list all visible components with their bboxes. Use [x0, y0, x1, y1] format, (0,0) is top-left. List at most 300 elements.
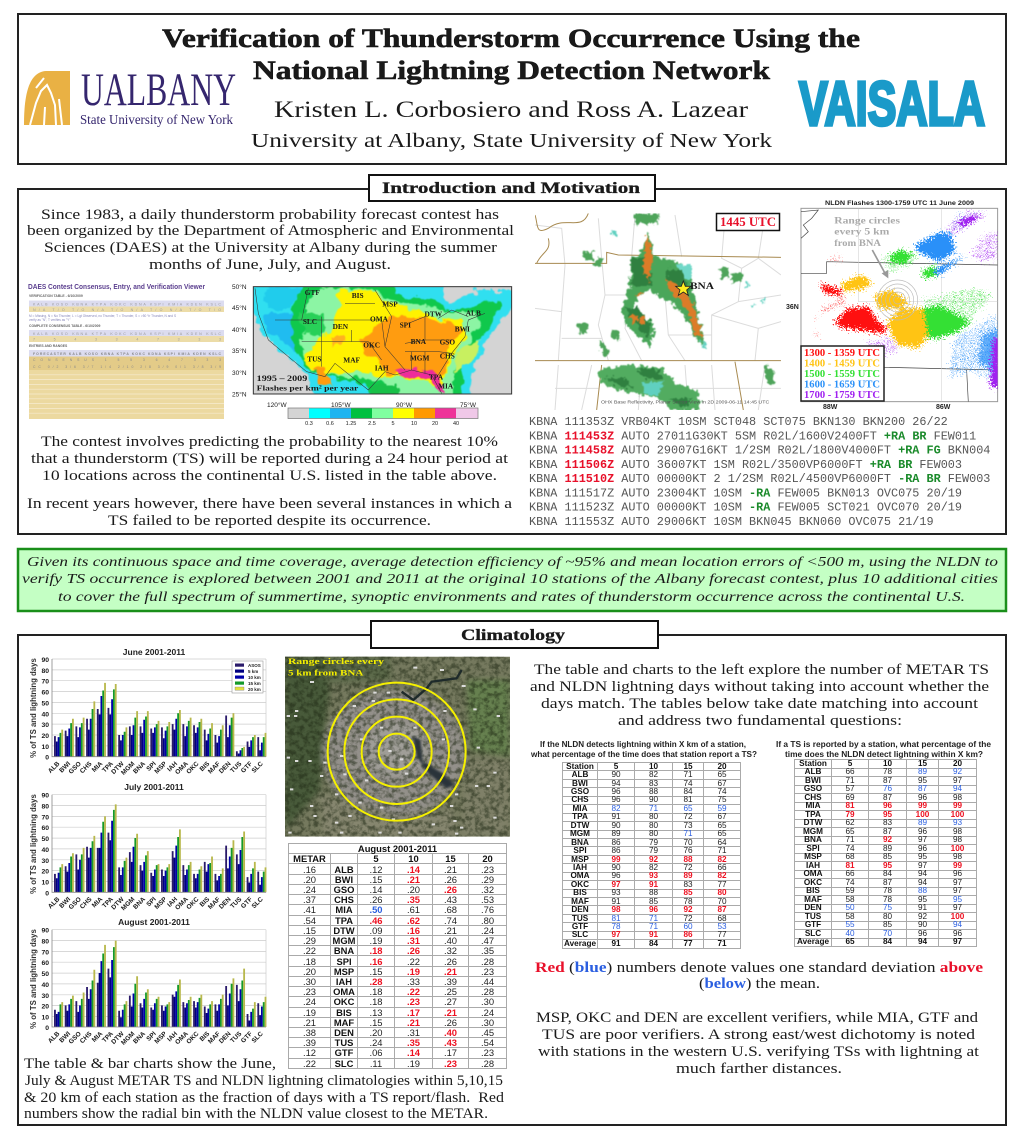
table: NLDN detection given TS: 84 [883, 869, 892, 878]
table: NLDN detection given TS: 10 [883, 759, 892, 768]
map axis labels [232, 283, 477, 409]
table: August METAR and NLDN climatology: .17 [444, 1047, 457, 1058]
table: TS given NLDN detection: 82 [649, 863, 658, 872]
table: August METAR and NLDN climatology: .18 [369, 996, 383, 1007]
chart: August 2001-2011: TUS [229, 1030, 244, 1045]
text: failure instances: In recent years however, there have been several instances in which a [27, 496, 513, 512]
chart: July 2001-2011: 70 [41, 814, 49, 821]
text: METAR observations: KBNA 111353Z VRB04KT 10SM SCT048 SCT075 BKN130 BKN200 26/22 [529, 415, 948, 429]
chart: August 2001-2011: 70 [41, 949, 49, 956]
title: National Lightning Detection Network [253, 55, 770, 85]
text: climatology intro [530, 662, 989, 729]
color bar legend: 10 [411, 421, 417, 427]
table: August METAR and NLDN climatology: .28 [481, 1058, 494, 1069]
chart: August 2001-2011: 0 [45, 1025, 49, 1032]
table: TS given NLDN detection: 68 [717, 914, 727, 923]
text: verifier conclusions [536, 1010, 979, 1077]
table: NLDN detection given TS: 96 [883, 801, 892, 810]
table: NLDN detection given TS: MAF [804, 895, 822, 904]
table: August METAR and NLDN climatology: .62 [407, 915, 420, 926]
table: NLDN detection given TS: 95 [918, 776, 927, 785]
table: August METAR and NLDN climatology: .23 [303, 986, 316, 997]
table: NLDN detection given TS [794, 759, 977, 948]
table: August METAR and NLDN climatology: .29 [303, 935, 316, 946]
table: NLDN detection given TS: 98 [953, 852, 962, 861]
table: TS given NLDN detection: 88 [649, 787, 658, 796]
screenshot: contest viewer table: M = Missing, N = No Thunder, L = Lgt Observed, no Thunder, T = Thunder, S = >50 Yr Thunder, N and S [29, 314, 176, 318]
map axis labels: 75°W [460, 401, 477, 409]
screenshot: contest viewer table: N/A T/O T/O N/A T/O N/A T/O N/A T/O T/O [33, 308, 221, 312]
table: August METAR and NLDN climatology: .74 [444, 915, 457, 926]
table: NLDN detection given TS: 92 [953, 767, 962, 776]
table: TS given NLDN detection: GTF [572, 922, 588, 931]
screenshot: contest viewer table: KALB KOSO KBNA KTPA KOKC KDNA KSPI KMIA KDEN KSLC [33, 302, 221, 306]
table: TS given NLDN detection: 66 [717, 863, 727, 872]
table: August METAR and NLDN climatology: .35 [407, 894, 420, 905]
legend: flash time bins [801, 346, 884, 401]
table: August METAR and NLDN climatology: .61 [407, 904, 420, 915]
radar image [535, 213, 781, 410]
map: flash density: MAF [343, 355, 361, 364]
table: TS given NLDN detection: 97 [611, 930, 621, 939]
table: August METAR and NLDN climatology: DTW [333, 925, 355, 936]
chart: July 2001-2011: BWI [58, 896, 72, 910]
table: TS given NLDN detection: 96 [611, 871, 621, 880]
chart: June 2001-2011: SLC [251, 760, 265, 775]
table: TS given NLDN detection: 65 [717, 770, 727, 779]
table: NLDN detection given TS: 95 [883, 810, 892, 819]
table: TS given NLDN detection: 53 [717, 922, 727, 931]
table 1 heading: If the NLDN detects lightning within X km of a station, [540, 739, 746, 749]
table: August METAR and NLDN climatology: .12 [369, 864, 383, 875]
table: NLDN detection given TS: 96 [918, 827, 927, 836]
table: NLDN detection given TS: 58 [845, 895, 855, 904]
chart: June 2001-2011: 50 [41, 700, 49, 707]
table: August METAR and NLDN climatology: .12 [303, 1047, 316, 1058]
table: NLDN detection given TS: 89 [918, 818, 927, 827]
table: TS given NLDN detection: 70 [717, 897, 727, 906]
chart: June 2001-2011: 90 [41, 657, 49, 664]
panel: climatology [18, 621, 1006, 1125]
table: August METAR and NLDN climatology: .24 [369, 1037, 383, 1048]
chart: August 2001-2011: MGM [120, 1030, 136, 1047]
table: August METAR and NLDN climatology: .43 [444, 1037, 457, 1048]
table: TS given NLDN detection: OMA [570, 871, 590, 880]
table: August METAR and NLDN climatology: .26 [444, 956, 457, 967]
screenshot: contest viewer table: COMPLETE CONSENSUS TABLE - 6/10/2009 [29, 324, 100, 328]
table: NLDN detection given TS: 78 [883, 895, 892, 904]
table: TS given NLDN detection: 79 [649, 838, 658, 847]
chart: August 2001-2011: % of TS and lightning days [29, 929, 38, 1029]
table: TS given NLDN detection: 93 [611, 888, 621, 897]
text: contest description [27, 207, 514, 273]
table: NLDN detection given TS: 65 [845, 937, 855, 946]
table: TS given NLDN detection: 84 [683, 787, 693, 796]
table: August METAR and NLDN climatology: .31 [407, 1027, 420, 1038]
legend: chart series: 5 km [248, 669, 258, 674]
chart: July 2001-2011: July 2001-2011 [124, 782, 184, 792]
table: August METAR and NLDN climatology: .24 [303, 884, 316, 895]
chart: July 2001-2011: BIS [199, 896, 212, 909]
text: contest rules: that a thunderstorm (TS) will be reported during a 24 hour period at [31, 451, 508, 467]
text: METAR observations: KBNA 111517Z AUTO 23004KT 10SM -RA FEW005 BKN013 OVC075 20/19 [529, 486, 962, 500]
table: NLDN detection given TS: 74 [845, 844, 855, 853]
chart: July 2001-2011: 80 [41, 804, 49, 810]
legend: flash time bins: 1600 - 1659 UTC [804, 380, 880, 390]
color bar legend: 20 [432, 421, 438, 427]
table: TS given NLDN detection: 77 [683, 939, 693, 948]
satellite image with range circles: 5 km from BNA [288, 668, 363, 677]
table: TS given NLDN detection: 90 [611, 821, 621, 830]
table: August METAR and NLDN climatology: .26 [444, 884, 457, 895]
table: TS given NLDN detection: 88 [683, 855, 693, 864]
table: August METAR and NLDN climatology: MSP [334, 966, 354, 977]
table: August METAR and NLDN climatology: TPA [335, 915, 353, 926]
text: chart description [24, 1056, 504, 1122]
chart: August 2001-2011: 40 [41, 982, 49, 989]
chart: August 2001-2011: BNA [132, 1030, 147, 1045]
table: August METAR and NLDN climatology: OKC [334, 996, 354, 1007]
chart: NLDN flash map: every 5 km [834, 227, 890, 237]
table: NLDN detection given TS: 97 [953, 903, 962, 912]
table: TS given NLDN detection: 80 [649, 829, 658, 838]
map: flash density: BIS [352, 291, 364, 300]
logo: UAlbany: State University of New York [80, 113, 233, 128]
table: NLDN detection given TS: 100 [951, 912, 964, 921]
table: TS given NLDN detection: 86 [611, 838, 621, 847]
color bar legend: 1.25 [346, 421, 356, 427]
table: NLDN detection given TS: 97 [953, 886, 962, 895]
screenshot: contest viewer table [28, 284, 224, 419]
chart: June 2001-2011: DEN [218, 760, 233, 775]
table: NLDN detection given TS: 75 [883, 903, 892, 912]
chart: June 2001-2011: OKC [185, 760, 201, 776]
table: NLDN detection given TS: BWI [805, 776, 821, 785]
table: August METAR and NLDN climatology: .19 [407, 966, 420, 977]
affiliation: University at Albany, State University of New York [251, 130, 773, 152]
screenshot: contest viewer table: DAES Contest Consensus, Entry, and Verification Viewer [28, 284, 205, 291]
table: NLDN detection given TS: TPA [805, 810, 821, 819]
chart: June 2001-2011: BNA [132, 760, 147, 775]
table: TS given NLDN detection: 80 [649, 812, 658, 821]
table: August METAR and NLDN climatology: .18 [369, 945, 383, 956]
text: verifier conclusions: TUS are poor verifiers. A strong east/west dichotomy is noted [542, 1027, 975, 1043]
table: NLDN detection given TS: 96 [918, 793, 927, 802]
map axis labels: 45°N [232, 304, 247, 312]
table: August METAR and NLDN climatology: .30 [481, 1017, 494, 1028]
panel: header [18, 14, 1006, 164]
table: August METAR and NLDN climatology: .53 [481, 894, 494, 905]
table: August METAR and NLDN climatology: .16 [407, 925, 420, 936]
table: TS given NLDN detection: 70 [683, 838, 693, 847]
table: August METAR and NLDN climatology: .20 [369, 1027, 383, 1038]
table: NLDN detection given TS: 92 [883, 835, 892, 844]
table: August METAR and NLDN climatology: .24 [303, 996, 316, 1007]
time label: 1445 UTC: 1445 UTC [720, 215, 776, 229]
table: TS given NLDN detection: 67 [717, 812, 727, 821]
text: chart description: numbers show the radial bin with the NLDN value closest to the METAR. [24, 1106, 488, 1122]
chart: July 2001-2011: 90 [41, 793, 49, 800]
table: TS given NLDN detection: 97 [611, 880, 621, 889]
table: August METAR and NLDN climatology: MIA [335, 904, 353, 915]
table: TS given NLDN detection: 82 [611, 804, 621, 813]
table: NLDN detection given TS: 70 [883, 929, 892, 938]
table: August METAR and NLDN climatology: .14 [407, 864, 420, 875]
table: TS given NLDN detection: BIS [573, 888, 587, 897]
table: NLDN detection given TS: 94 [953, 920, 962, 929]
table: August METAR and NLDN climatology: .68 [444, 904, 457, 915]
color bar legend: 0.6 [326, 421, 334, 427]
chart: July 2001-2011: MAF [207, 896, 222, 911]
table: TS given NLDN detection: 91 [611, 812, 621, 821]
table: August METAR and NLDN climatology: .21 [407, 1017, 420, 1028]
chart: June 2001-2011: TUS [229, 760, 244, 775]
map axis labels: 30°N [232, 369, 247, 377]
chart: August 2001-2011: 60 [41, 960, 49, 967]
table: TS given NLDN detection: 86 [611, 846, 621, 855]
table: TS given NLDN detection: 91 [611, 897, 621, 906]
chart: June 2001-2011: June 2001-2011 [123, 647, 185, 657]
table: TS given NLDN detection: 64 [717, 838, 727, 847]
table: August METAR and NLDN climatology: .30 [481, 996, 494, 1007]
table: TS given NLDN detection: SPI [573, 846, 587, 855]
text: failure instances: TS failed to be reported despite its occurrence. [108, 513, 431, 529]
table: NLDN detection given TS: 97 [953, 776, 962, 785]
table: NLDN detection given TS: 98 [953, 827, 962, 836]
table: TS given NLDN detection: 78 [683, 897, 693, 906]
callout: NLDN summary [18, 549, 1006, 611]
table: TS given NLDN detection: IAH [573, 863, 587, 872]
text: climatology intro: and address two fundamental questions: [618, 713, 902, 729]
table: August METAR and NLDN climatology: .22 [407, 986, 420, 997]
chart: June 2001-2011: 30 [41, 722, 49, 729]
chart: June 2001-2011: 20 [41, 733, 49, 740]
heading: introduction: Introduction and Motivation [382, 180, 640, 197]
text: METAR observations: KBNA 111453Z AUTO 27011G30KT 5SM R02L/1600V2400FT +RA BR FEW011 [529, 429, 976, 443]
table: NLDN detection given TS: 95 [918, 852, 927, 861]
table: NLDN detection given TS: 97 [953, 937, 962, 946]
chart: August 2001-2011: 20 [41, 1004, 49, 1011]
chart: August 2001-2011: MIA [91, 1030, 104, 1044]
legend: flash time bins: 1500 - 1559 UTC [804, 369, 880, 380]
table: TS given NLDN detection: 65 [717, 829, 727, 838]
table: August METAR and NLDN climatology: .39 [303, 1037, 316, 1048]
table: TS given NLDN detection: 92 [683, 905, 693, 914]
table: August METAR and NLDN climatology: 15 [445, 853, 456, 864]
chart: August 2001-2011: SLC [251, 1030, 265, 1045]
table: NLDN detection given TS: 85 [883, 920, 892, 929]
chart: August 2001-2011: BIS [199, 1030, 212, 1043]
chart: July 2001-2011: 20 [41, 869, 49, 876]
table: August METAR and NLDN climatology: .14 [407, 1047, 420, 1058]
table: NLDN detection given TS: 94 [918, 937, 927, 946]
chart: NLDN flash map: Range circles [834, 216, 901, 226]
table: TS given NLDN detection: MSP [571, 855, 589, 864]
table: August METAR and NLDN climatology: .31 [407, 935, 420, 946]
text: METAR observations: KBNA 111510Z AUTO 00000KT 2 1/2SM R02L/4500VP6000FT -RA BR FEW003 [529, 472, 990, 486]
map: flash density: TUS [307, 354, 321, 363]
heading: climatology [371, 621, 658, 648]
table: NLDN detection given TS: 5 [848, 759, 852, 768]
table: NLDN detection given TS: 88 [918, 886, 927, 895]
chart: August 2001-2011: 10 [41, 1014, 49, 1022]
chart: June 2001-2011: MSP [153, 760, 169, 775]
table: August METAR and NLDN climatology: .25 [444, 986, 457, 997]
text: climatology intro: days match. The tables below take date matching into account [541, 696, 978, 712]
table: August METAR and NLDN climatology: .27 [444, 996, 457, 1007]
table: NLDN detection given TS: 20 [953, 759, 962, 768]
chart: August 2001-2011: TPA [101, 1030, 115, 1044]
table: August METAR and NLDN climatology: .20 [303, 966, 316, 977]
table: TS given NLDN detection: 65 [717, 821, 727, 830]
table: TS given NLDN detection: GSO [571, 787, 589, 796]
table: TS given NLDN detection: BNA [571, 838, 589, 847]
table: NLDN detection given TS: 71 [845, 776, 855, 785]
heading: climatology: Climatology [461, 627, 565, 644]
table: NLDN detection given TS: 95 [883, 861, 892, 870]
map: flash density: Flashes per km² per year [257, 383, 359, 392]
map: flash density: MGM [410, 354, 429, 363]
table: August METAR and NLDN climatology: .26 [444, 1017, 457, 1028]
table: August METAR and NLDN climatology: .23 [407, 996, 420, 1007]
table: NLDN detection given TS: 66 [845, 767, 855, 776]
title: Verification of Thunderstorm Occurrence Using the [162, 23, 860, 53]
table: NLDN detection given TS: ALB [805, 767, 821, 776]
chart: June 2001-2011: 70 [41, 679, 49, 686]
table: August METAR and NLDN climatology: .40 [444, 935, 457, 946]
table: August METAR and NLDN climatology: .23 [481, 864, 494, 875]
text: verifier conclusions: MSP, OKC and DEN are excellent verifiers, while MIA, GTF and [536, 1010, 978, 1026]
table: TS given NLDN detection: 71 [717, 939, 727, 948]
table: TS given NLDN detection: BWI [572, 779, 588, 788]
legend: flash time bins: 1400 - 1459 UTC [804, 358, 880, 370]
table: TS given NLDN detection: 87 [717, 905, 727, 914]
chart: July 2001-2011: TPA [101, 896, 115, 910]
legend: chart series: ASOS [248, 663, 261, 668]
table: TS given NLDN detection: 89 [683, 871, 693, 880]
text: colour key note: (below ) the mean. [699, 976, 820, 992]
chart: June 2001-2011: ALB [47, 760, 62, 775]
table: August METAR and NLDN climatology: .21 [444, 966, 457, 977]
table: August METAR and NLDN climatology: .37 [303, 894, 316, 905]
chart: June 2001-2011: BIS [199, 760, 212, 773]
chart: NLDN flash map: 88W [823, 404, 838, 411]
chart: August 2001-2011: OKC [185, 1030, 201, 1046]
table: NLDN detection given TS: 97 [918, 835, 927, 844]
table: TS given NLDN detection: DEN [571, 905, 589, 914]
text: verifier conclusions: with stations in the western U.S. verifying TSs with lightning at [538, 1044, 979, 1060]
chart: August 2001-2011: SPI [145, 1030, 158, 1043]
table: NLDN detection given TS: 94 [918, 869, 927, 878]
chart: August 2001-2011: 90 [41, 928, 49, 935]
table: TS given NLDN detection: 67 [717, 779, 727, 788]
text: chart description: The table & bar charts show the June, [24, 1056, 276, 1072]
table: August METAR and NLDN climatology: .21 [444, 864, 457, 875]
table: NLDN detection given TS: 59 [845, 886, 855, 895]
table: TS given NLDN detection: 74 [683, 779, 693, 788]
chart: August 2001-2011: BWI [58, 1030, 72, 1044]
screenshot: contest viewer table: verify as "N", T verifies as "Y" [29, 318, 70, 322]
table: NLDN detection given TS: 57 [845, 784, 855, 793]
table: August METAR and NLDN climatology: .32 [444, 945, 457, 956]
text: contest rules: 10 locations across the continental U.S. listed in the table above. [42, 468, 497, 484]
chart: June 2001-2011: BWI [58, 760, 72, 774]
table: August METAR and NLDN climatology: .45 [481, 1027, 494, 1038]
table: NLDN detection given TS: 95 [953, 895, 962, 904]
chart: June 2001-2011: IAH [166, 760, 179, 773]
table: NLDN detection given TS: GSO [804, 784, 822, 793]
table: NLDN detection given TS: CHS [804, 793, 822, 802]
chart: NLDN flash map: 36N [786, 304, 799, 311]
table: August METAR and NLDN climatology: SLC [335, 1058, 353, 1069]
table: August METAR and NLDN climatology: .47 [481, 935, 494, 946]
chart: July 2001-2011: OMA [174, 896, 190, 912]
chart: June 2001-2011: MIA [91, 760, 104, 774]
table: TS given NLDN detection: MIA [572, 804, 588, 813]
table: NLDN detection given TS: 69 [845, 793, 855, 802]
table: TS given NLDN detection: SLC [572, 930, 588, 939]
table: NLDN detection given TS: SPI [806, 844, 820, 853]
table: August METAR and NLDN climatology: .21 [303, 1017, 316, 1028]
table: NLDN detection given TS: 71 [845, 835, 855, 844]
text: contest description: months of June, July, and August. [149, 257, 391, 273]
text: contest rules: The contest involves predicting the probability to the nearest 10% [41, 434, 498, 450]
chart: August 2001-2011: 30 [41, 993, 49, 1000]
map: flash density: IAH [375, 364, 389, 373]
text: chart description: & 20 km of each station as the fraction of days with a TS report/flash. Red [24, 1090, 504, 1106]
text: contest rules [31, 434, 508, 484]
table: TS given NLDN detection: 71 [649, 922, 658, 931]
text: METAR observations: KBNA 111523Z AUTO 00000KT 10SM -RA FEW005 SCT021 OVC070 20/19 [529, 501, 962, 515]
table: TS given NLDN detection: 93 [649, 871, 658, 880]
table 1 heading [530, 739, 757, 759]
table: August METAR and NLDN climatology: .18 [369, 986, 383, 997]
map: flash density: CHS [440, 351, 455, 360]
map: flash density: GSO [440, 338, 455, 347]
chart: July 2001-2011: MGM [120, 896, 136, 912]
chart: July 2001-2011: CHS [79, 896, 94, 911]
chart: August 2001-2011: ALB [47, 1030, 62, 1045]
table: NLDN detection given TS: 87 [883, 878, 892, 887]
table: August METAR and NLDN climatology: GTF [335, 1047, 353, 1058]
map: flash density: BNA [411, 337, 427, 346]
table: August METAR and NLDN climatology: .23 [481, 1047, 494, 1058]
legend: chart series: 20 km [248, 687, 261, 692]
table: NLDN detection given TS: 96 [953, 929, 962, 938]
table: TS given NLDN detection: 71 [683, 829, 693, 838]
chart: NLDN flash map: from BNA [834, 238, 882, 248]
table: NLDN detection given TS: 83 [883, 818, 892, 827]
table: NLDN detection given TS: 94 [918, 878, 927, 887]
table: August METAR and NLDN climatology: .20 [407, 884, 420, 895]
chart: August 2001-2011: IAH [166, 1030, 179, 1043]
map: flash density: DEN [333, 322, 349, 331]
logo: UAlbany: UALBANY [81, 64, 236, 116]
panel: introduction and motivation [18, 175, 1006, 534]
table: TS given NLDN detection: ALB [572, 770, 588, 779]
screenshot: contest viewer table: CC 0/2 3/6 3/7 1/4 2/10 2/8 3/9 0/1 3/8 3/9 [33, 365, 221, 369]
callout: NLDN summary: to cover the full spectrum of summertime, synoptic environments and rates of thunderstorm occurrence across the continental U.S. [58, 590, 965, 605]
table: NLDN detection given TS: 96 [953, 869, 962, 878]
chart: NLDN flash map: 86W [936, 404, 951, 411]
table: NLDN detection given TS: 92 [918, 912, 927, 921]
table: NLDN detection given TS: 97 [953, 878, 962, 887]
table 2 heading: If a TS is reported by a station, what percentage of the [776, 739, 991, 749]
map axis labels: 25°N [232, 390, 247, 398]
table: TS given NLDN detection: 71 [649, 914, 658, 923]
text: colour key note: Red (blue ) numbers denote values one standard deviation above [535, 960, 983, 976]
table: TS given NLDN detection: 82 [717, 855, 727, 864]
